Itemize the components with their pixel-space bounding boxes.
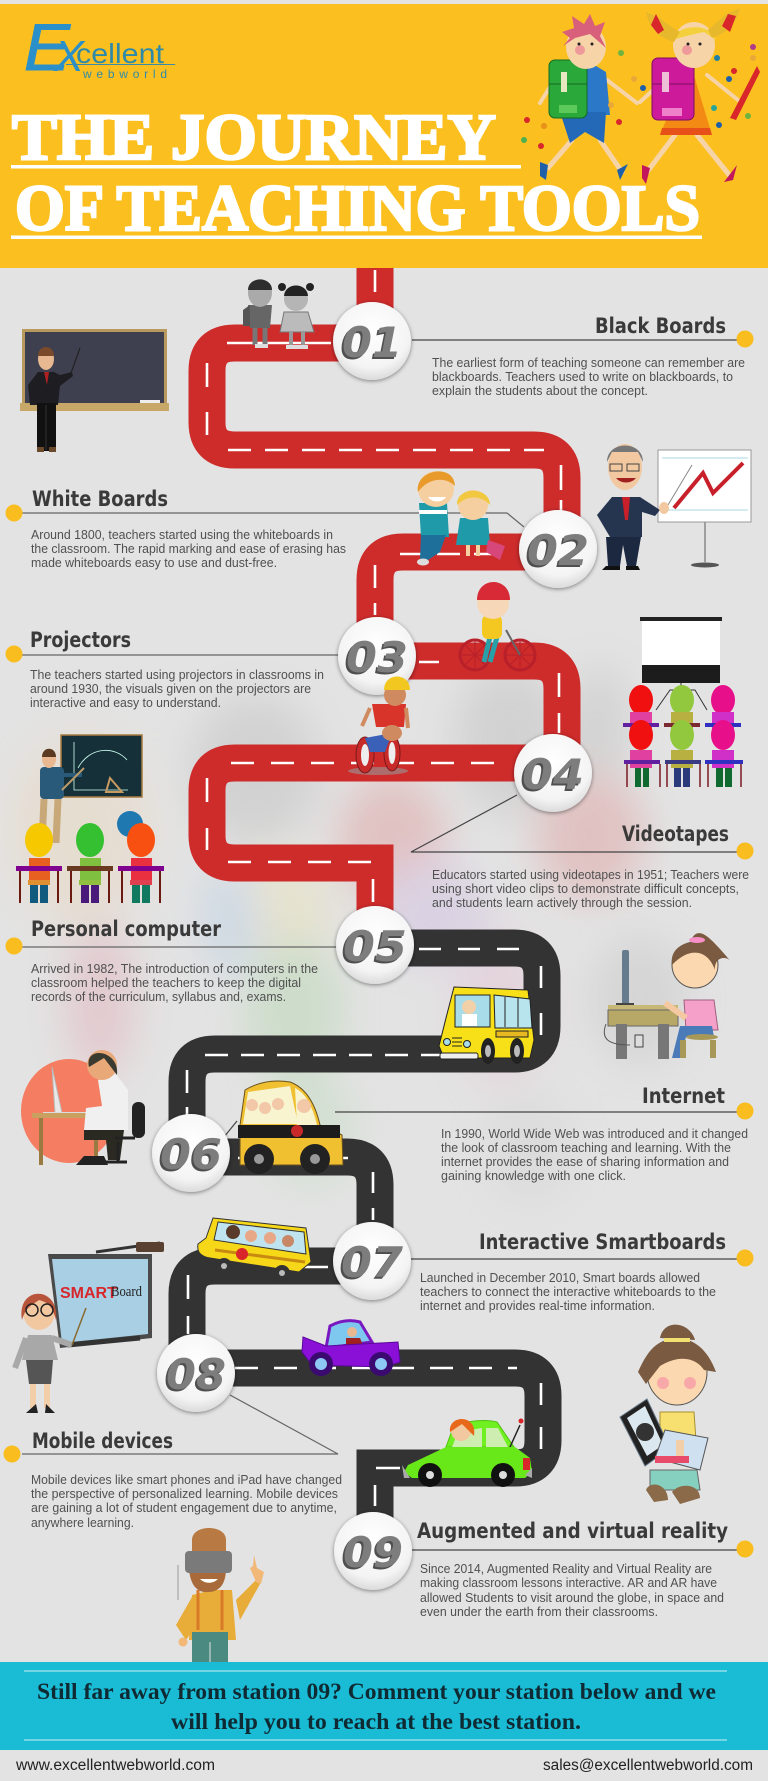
- heading: Videotapes: [622, 822, 729, 846]
- connector line: [22, 654, 340, 656]
- blurred background figures: [10, 665, 690, 1205]
- title: OF TEACHING TOOLS: [15, 172, 700, 245]
- connector line: [22, 946, 337, 948]
- station 01 badge: 01: [342, 318, 402, 367]
- icon: smart board and teacher: SMART: [60, 1285, 117, 1302]
- body text: [30, 668, 324, 710]
- body text: classroom helped the teachers to keep the digital: [31, 976, 301, 990]
- body text: Mobile devices like smart phones and iPad have changed: [31, 1473, 342, 1487]
- body text: [31, 1473, 342, 1530]
- icon: child on red bicycle: [460, 582, 535, 670]
- section: Internet: [224, 1084, 754, 1183]
- call to action text: Still far away from station 09? Comment your station below and we: [37, 1679, 716, 1705]
- marker dot: [736, 1250, 754, 1266]
- section: Videotapes: [411, 795, 754, 910]
- marker dot: [736, 330, 754, 348]
- body text: are gaining a lot of student engagement due to anytime,: [31, 1501, 337, 1515]
- connector line: [412, 1549, 738, 1551]
- body text: Since 2014, Augmented Reality and Virtual Reality are: [420, 1562, 712, 1576]
- heading: Projectors: [30, 628, 131, 652]
- connector line: [22, 513, 524, 527]
- body text: allowed Students to visit around the globe, in space and: [420, 1591, 724, 1605]
- icon: yellow school bus front: [439, 987, 534, 1064]
- red road: [207, 268, 562, 945]
- body text: [441, 1127, 748, 1183]
- body text: even under the earth from their classrooms.: [420, 1605, 658, 1619]
- title: [11, 101, 702, 245]
- body text: [432, 868, 749, 910]
- black road: [187, 948, 543, 1551]
- body text: [432, 356, 745, 398]
- station 04 badge: 04: [522, 750, 584, 799]
- station 03 badge: 03: [346, 633, 408, 682]
- station 09 badge: 09: [343, 1528, 403, 1577]
- marker dot: [736, 842, 754, 860]
- icon: projector screen: [640, 617, 722, 690]
- icon: child on racing bike: [348, 676, 410, 775]
- icon: yellow cartoon bus with kids: [238, 1081, 343, 1174]
- body text: Launched in December 2010, Smart boards allowed: [420, 1271, 700, 1285]
- body text: anywhere learning.: [31, 1516, 134, 1530]
- marker dot: [736, 1540, 754, 1558]
- header band: [0, 4, 768, 268]
- connector line: [224, 1112, 738, 1137]
- body text: teachers to connect the interactive whiteboards to the: [420, 1285, 716, 1299]
- icon: two kids holding hands: [417, 471, 505, 566]
- website and email: [15, 1757, 753, 1774]
- title: THE JOURNEY: [12, 101, 496, 174]
- body text: [420, 1271, 716, 1313]
- body text: the perspective of personalized learning. Mobile devices: [31, 1487, 338, 1501]
- logo: webworld: [82, 67, 167, 81]
- connector line: [412, 339, 738, 341]
- body text: records of the curriculum, syllabus and, exams.: [31, 990, 286, 1004]
- connector line: [411, 1258, 738, 1260]
- section: Projectors: [6, 628, 340, 710]
- connector line: [411, 795, 738, 852]
- icon: smart board and teacher: [15, 1242, 164, 1413]
- call to action text: will help you to reach at the best station.: [171, 1709, 581, 1735]
- body text: made whiteboards easy to use and dust-free.: [31, 556, 277, 570]
- icon: side-view school bus: [198, 1218, 311, 1281]
- road lane markings: [187, 270, 561, 1506]
- body text: blackboards. Teachers used to write on blackboards, to: [432, 370, 733, 384]
- section: Black Boards: [412, 314, 754, 398]
- section: Personal computer: [6, 917, 337, 1004]
- marker dot: [736, 1102, 754, 1120]
- body text: Arrived in 1982, The introduction of computers in the: [31, 962, 318, 976]
- section: White Boards: [6, 487, 524, 570]
- website and email: www.excellentwebworld.com: [15, 1757, 215, 1774]
- body text: [420, 1562, 724, 1619]
- body text: around 1930, the visuals given on the projectors are: [30, 682, 311, 696]
- heading: Mobile devices: [32, 1429, 173, 1453]
- logo: [24, 10, 175, 84]
- station 08 badge: 08: [166, 1350, 226, 1399]
- body text: The teachers started using projectors in classrooms in: [30, 668, 324, 682]
- icon: boy and girl with backpacks: [521, 8, 760, 184]
- body text: interactive and easy to understand.: [30, 696, 221, 710]
- station 09 badge: [334, 1512, 412, 1590]
- body text: Educators started using videotapes in 1951; Teachers were: [432, 868, 749, 882]
- heading: Interactive Smartboards: [479, 1230, 726, 1254]
- icon: purple car: [302, 1321, 400, 1376]
- body text: the classroom. The rapid marking and ease of erasing has: [31, 542, 346, 556]
- heading: Personal computer: [31, 917, 222, 941]
- heading: White Boards: [32, 487, 168, 511]
- icon: girl at computer: [604, 933, 730, 1059]
- footer call to action: [0, 1662, 768, 1750]
- icon: smart board and teacher: Board: [111, 1284, 142, 1300]
- body text: the look of classroom teaching and learning. With the: [441, 1141, 731, 1155]
- marker dot: [6, 646, 22, 662]
- call to action text: [37, 1679, 716, 1735]
- body text: [31, 962, 318, 1004]
- icon: businessman with chart: [597, 444, 751, 570]
- marker dot: [4, 1446, 20, 1462]
- station 02 badge: 02: [527, 526, 589, 575]
- icon: teacher with students and globe: [16, 735, 164, 903]
- icon: man with VR headset: [176, 1528, 264, 1662]
- station 02 badge: [519, 510, 597, 588]
- station 05 badge: [336, 906, 414, 984]
- station 07 badge: 07: [341, 1238, 404, 1287]
- body text: internet provides the ease of sharing information and: [441, 1155, 729, 1169]
- section: Mobile devices: [4, 1395, 342, 1530]
- body text: Around 1800, teachers started using the whiteboards in: [31, 528, 333, 542]
- logo: cellent: [76, 38, 164, 69]
- station 04 badge: [514, 734, 592, 812]
- body text: In 1990, World Wide Web was introduced and it changed: [441, 1127, 748, 1141]
- website and email: sales@excellentwebworld.com: [543, 1757, 753, 1774]
- section: Interactive Smartboards: [411, 1230, 754, 1313]
- body text: making classroom lessons interactive. AR and AR have: [420, 1576, 717, 1590]
- station 05 badge: 05: [343, 922, 407, 971]
- logo: X: [53, 32, 86, 81]
- station 01 badge: [333, 302, 411, 380]
- heading: Augmented and virtual reality: [417, 1519, 728, 1543]
- body text: [31, 528, 346, 570]
- icon: teacher at blackboard: [20, 329, 169, 452]
- icon: green car: [402, 1418, 532, 1487]
- marker dot: [6, 938, 22, 954]
- station 03 badge: [338, 617, 416, 695]
- heading: Black Boards: [595, 314, 726, 338]
- station 07 badge: [333, 1222, 411, 1300]
- icon: grayscale kids: [243, 279, 314, 347]
- body text: explain the students about the concept.: [432, 384, 648, 398]
- icon: girl with tablet and book: [620, 1325, 716, 1504]
- connector line: [22, 1395, 338, 1454]
- body text: internet and provides real-time information.: [420, 1299, 655, 1313]
- body text: and students learn actively through the session.: [432, 896, 692, 910]
- section: Augmented and virtual reality: [412, 1519, 754, 1619]
- icon: man at desk with salmon circle: [21, 1050, 145, 1165]
- marker dot: [6, 504, 22, 522]
- station 06 badge: [152, 1114, 230, 1192]
- icon: six students at desks: [623, 685, 743, 787]
- body text: The earliest form of teaching someone can remember are: [432, 356, 745, 370]
- body text: using short video clips to demonstrate difficult concepts,: [432, 882, 739, 896]
- body text: gaining knowledge with one click.: [441, 1169, 626, 1183]
- station 08 badge: [157, 1334, 235, 1412]
- logo: E: [24, 10, 71, 84]
- heading: Internet: [642, 1084, 725, 1108]
- station 06 badge: 06: [160, 1130, 222, 1179]
